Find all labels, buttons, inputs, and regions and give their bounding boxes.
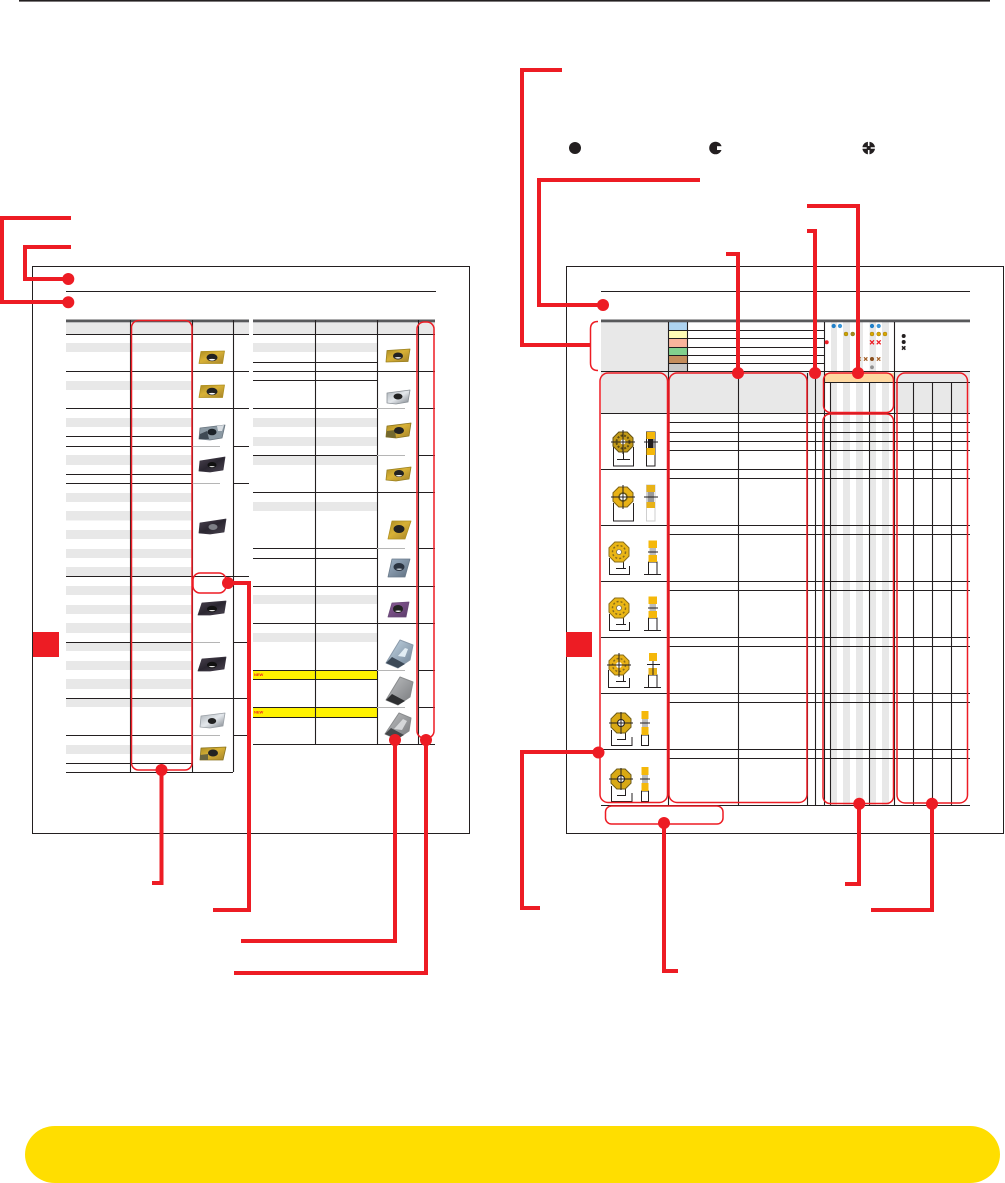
icon: steel insert	[388, 559, 410, 577]
right page panel	[566, 266, 1004, 834]
left table B	[253, 320, 435, 744]
left page red tab	[33, 632, 59, 657]
callout: right page top leaders	[522, 70, 858, 373]
icon: purple insert	[388, 602, 409, 617]
new-item row highlight 2	[253, 707, 377, 717]
callout outlines: rounded highlight boxes	[132, 320, 968, 824]
icon: half coolant dot	[709, 142, 723, 154]
left table A	[66, 320, 249, 772]
leader: right column	[234, 742, 426, 973]
icon: tall silver insert	[385, 713, 411, 739]
right page red tab	[566, 632, 592, 657]
callout box: code column	[132, 320, 192, 770]
column stripes	[831, 322, 889, 805]
legend markers	[902, 334, 906, 350]
leader: double column	[807, 231, 815, 373]
icon: cutter row 3	[609, 540, 661, 574]
leader: legend	[522, 70, 590, 345]
bottom yellow banner	[25, 1126, 1000, 1183]
grid lines	[601, 322, 970, 806]
icon: silver insert	[199, 425, 225, 440]
icon: gold insert	[199, 351, 224, 364]
icon: silver insert	[200, 713, 225, 728]
icon: dark insert	[198, 601, 226, 615]
insert photos: left table	[198, 351, 226, 760]
icon: full coolant dot	[569, 142, 581, 154]
icon: cutter row 1	[611, 430, 658, 466]
icon: gold insert	[388, 521, 411, 539]
icon: cutter row 4	[609, 596, 661, 630]
icon: gold insert	[200, 747, 226, 760]
icon: cutter row 5	[607, 653, 661, 688]
icon: cutter row 7	[609, 767, 650, 802]
new-item row highlight 1: NEW	[254, 672, 264, 677]
leader: grades	[845, 804, 859, 884]
insert photos: right table	[385, 349, 413, 739]
callout box: footer note	[606, 806, 723, 824]
leader: line 2	[25, 247, 71, 279]
callout box: grade body	[823, 414, 894, 804]
icon: gold insert	[386, 349, 410, 362]
leader: subheading	[539, 180, 700, 305]
grey header cells	[601, 372, 970, 414]
callout box: designation columns	[669, 373, 807, 802]
callout: left page bottom leaders	[152, 583, 426, 973]
icon: cutter row 2	[611, 485, 658, 521]
leader: dimensions	[871, 804, 932, 910]
icon: quarter coolant dot	[862, 141, 876, 155]
icon: silver insert	[387, 390, 410, 404]
leader: code column	[152, 772, 162, 883]
leader: header	[807, 206, 858, 373]
new-item row highlight 1	[253, 670, 377, 679]
icon: gold insert	[386, 423, 411, 438]
callout: right page bottom leaders	[522, 752, 932, 971]
leader: cutter image	[522, 752, 598, 908]
cutter diagrams	[607, 430, 661, 802]
left page panel	[32, 266, 470, 834]
icon: cutter row 6	[609, 711, 650, 746]
icon: dark insert	[198, 657, 226, 671]
leader: line 1	[2, 218, 71, 302]
material colour swatches	[669, 322, 688, 371]
leader: footer note	[664, 824, 678, 971]
leader: designation	[726, 254, 738, 373]
icon: tall grey insert	[386, 677, 413, 705]
leader: insert picture	[241, 742, 395, 941]
callout bracket: legend	[590, 322, 598, 370]
icon: dark insert	[199, 457, 225, 472]
top rule	[19, 0, 990, 2]
icon: gold insert	[199, 385, 224, 398]
callout box: right column	[417, 322, 434, 738]
callout: top-left leader lines	[2, 218, 71, 302]
leader: small cell	[213, 583, 249, 910]
callout box: peach header	[824, 373, 894, 412]
callout end dots	[62, 273, 938, 829]
new-item row highlight 2: NEW	[254, 710, 264, 715]
grey legend block	[601, 322, 668, 371]
icon: dark insert	[199, 519, 226, 534]
icon: gold insert	[386, 467, 411, 481]
callout box: small cell	[193, 573, 226, 593]
peach header band	[824, 373, 894, 382]
icon: tall blue insert	[386, 640, 413, 668]
right page table	[601, 320, 970, 806]
suitability dots	[825, 324, 887, 369]
callout box: cutter column	[600, 373, 668, 802]
callout box: dimensions	[897, 373, 968, 803]
